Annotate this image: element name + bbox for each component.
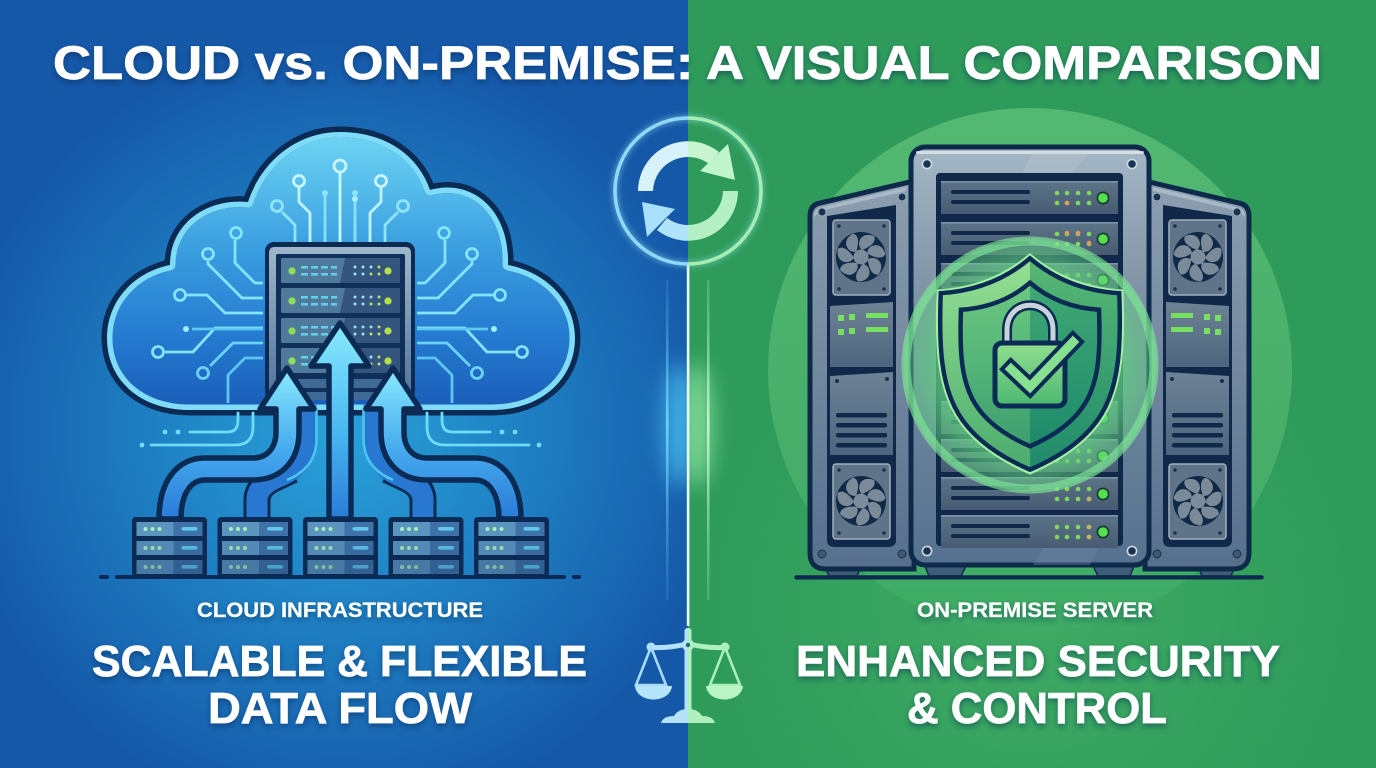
background: cloud side: [0, 0, 688, 768]
secondary data flow pipes: [257, 405, 423, 519]
arrow: left flow: [159, 368, 314, 519]
left label: cloud infrastructure: CLOUD INFRASTRUCTURE: [197, 599, 483, 622]
check mark: [1011, 342, 1073, 387]
server units: [941, 181, 1118, 548]
central server chassis: [911, 147, 1149, 565]
right label: on-premise server: ON-PREMISE SERVER: [917, 599, 1153, 622]
background: on-premise side: [688, 0, 1376, 768]
small server stacks: [132, 517, 549, 577]
right side rack: [1145, 181, 1249, 569]
icon: sync arrows: [615, 118, 761, 264]
left headline: line 2: DATA FLOW: [208, 684, 472, 733]
shield with padlock and check mark: [937, 255, 1123, 473]
illustration: cloud infrastructure: [99, 132, 581, 579]
ground line: [99, 575, 581, 579]
icon: balance scale: [635, 628, 743, 723]
ground line and feet: [795, 566, 1263, 579]
signal lines: [140, 413, 541, 447]
centre divider with glow: [664, 264, 712, 626]
server rack in cloud: [265, 242, 415, 400]
padlock: [995, 305, 1065, 406]
left headline: line 1: SCALABLE & FLEXIBLE: [92, 637, 587, 686]
arrow: right flow: [366, 368, 521, 519]
title: CLOUD vs. ON-PREMISE: A VISUAL COMPARISON: [53, 36, 1322, 89]
right headline: line 1: ENHANCED SECURITY: [796, 637, 1280, 686]
security glow ring: [904, 239, 1156, 491]
illustration: on-premise server: [795, 147, 1263, 579]
right headline: line 2: & CONTROL: [907, 684, 1167, 733]
arrow: centre flow: [311, 323, 369, 519]
cloud shape with circuit traces: [107, 132, 575, 410]
left side rack: [810, 181, 914, 569]
